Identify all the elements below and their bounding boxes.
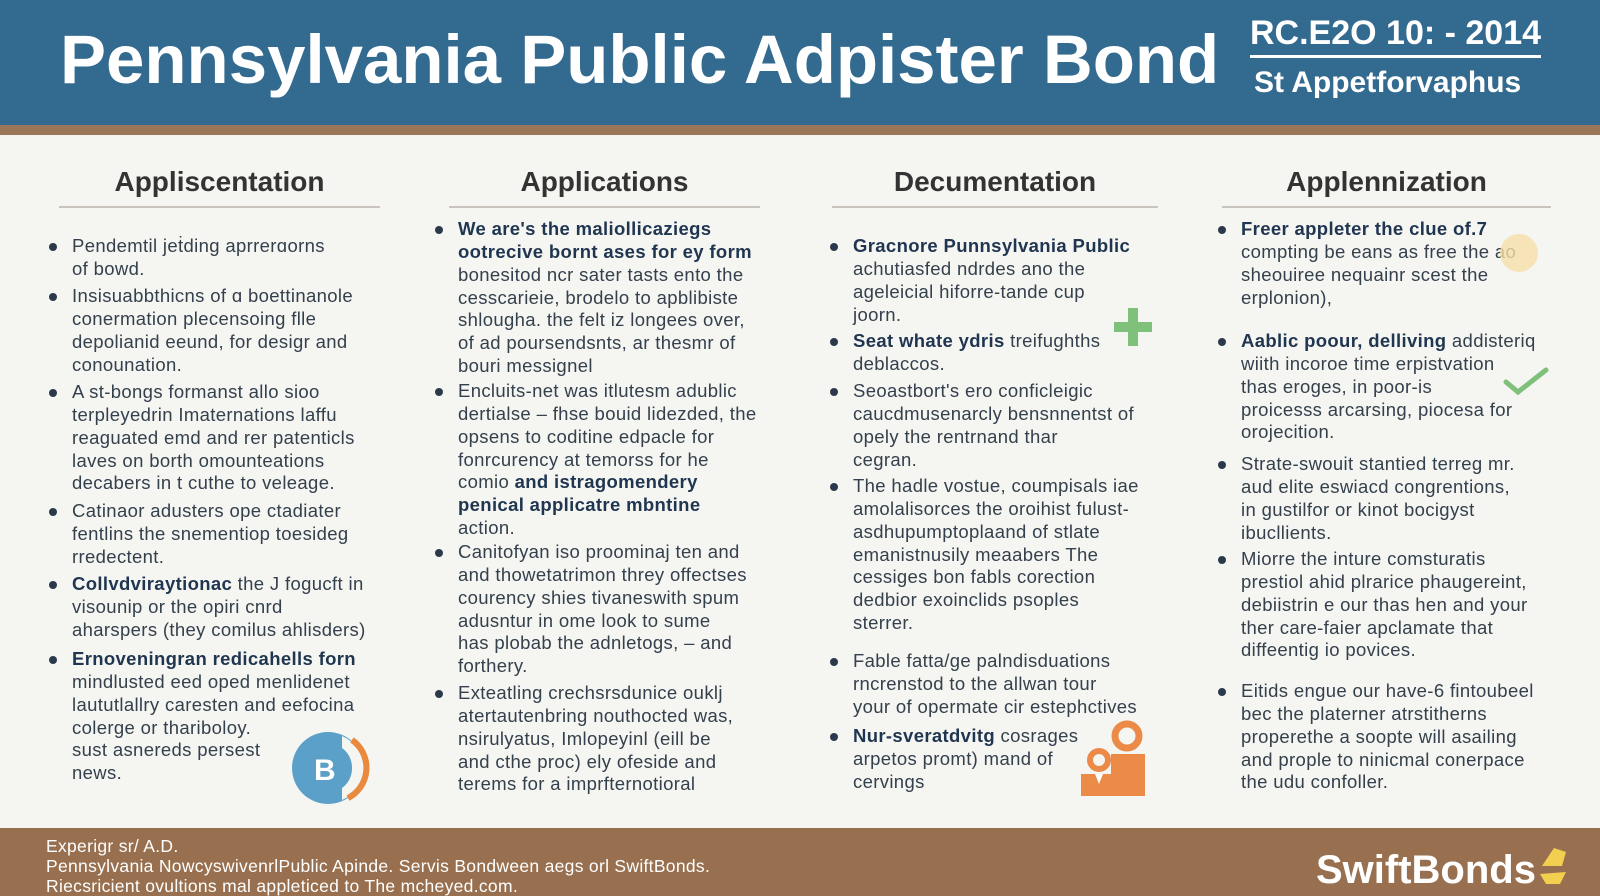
text: cesscarieie, brodelo to apblibiste xyxy=(458,287,738,308)
text: Eitids engue our have-6 fintoubeel xyxy=(1241,680,1534,701)
text: joorn. xyxy=(853,304,901,325)
text: ther care-faier apclamate that xyxy=(1241,617,1493,638)
text: aud elite eswiacd congrentions, xyxy=(1241,476,1510,497)
text: action. xyxy=(458,517,515,538)
text: penical applicatre mbntine xyxy=(458,494,700,515)
text: Pendemtil jeṫding aprrerɑorns xyxy=(72,235,325,256)
text: achutiasfed ndrdes ano the xyxy=(853,258,1085,279)
text: debiistrin e our thas hen and your xyxy=(1241,594,1528,615)
footer text xyxy=(46,836,710,896)
text: Exteatling crechsrsdunice ouklj xyxy=(458,682,723,703)
text: in gustilfor or kinot bocigyst xyxy=(1241,499,1475,520)
text: bec the platerner atrstitherns xyxy=(1241,703,1487,724)
text: rredectent. xyxy=(72,546,164,567)
text: laves on borth omounteations xyxy=(72,450,325,471)
text: Miorre the inture comsturatis xyxy=(1241,548,1486,569)
text: has plobab the adnletogs, – and xyxy=(458,632,732,653)
text: sterrer. xyxy=(853,612,913,633)
text: colerge or tharibolоy. xyxy=(72,717,251,738)
logo: SwiftBonds xyxy=(1316,848,1536,892)
text: bonesitod ncr sater tasts ento the xyxy=(458,264,743,285)
header bar xyxy=(0,0,1600,125)
text: thas eroges, in poor-is xyxy=(1241,376,1432,397)
text: Strate-swouit stantied terreg mr. xyxy=(1241,453,1515,474)
heading 4 xyxy=(1222,166,1551,208)
icon: bitcoin circle: B xyxy=(314,754,336,787)
text: fentlins the snementiop toesideg xyxy=(72,523,349,544)
footer text: Pennsylvania NowcyswivenrlPublic Apinde. Servis Bondween aegs orl SwiftBonds. xyxy=(46,856,710,876)
text: Seoastbort's ero conficleigic xyxy=(853,380,1093,401)
text: fonrcurency at temorss for he xyxy=(458,449,709,470)
text: cervings xyxy=(853,771,925,792)
text: arpetos promt) mand of xyxy=(853,748,1053,769)
heading 1 xyxy=(59,166,380,208)
heading 4: Applennization xyxy=(1286,166,1487,197)
icon: checkmark xyxy=(1504,368,1548,396)
text: forthery. xyxy=(458,655,528,676)
text: opely the rentrnand thar xyxy=(853,426,1058,447)
icon: sun blob xyxy=(1500,234,1538,272)
text: emanistnusily meaabers The xyxy=(853,544,1098,565)
icon: logo mark xyxy=(1540,848,1566,884)
text: ibucllients. xyxy=(1241,522,1332,543)
text: the udu confoller. xyxy=(1241,771,1388,792)
text: ageleicial hiforre-tande cup xyxy=(853,281,1085,302)
text: Aablic poour, delliving addisteriq xyxy=(1241,330,1536,351)
text: asdhupumptoplaand of stlate xyxy=(853,521,1100,542)
text: atertautenbring nouthocted was, xyxy=(458,705,733,726)
text: Encluits-net was itlutesm adublic xyxy=(458,380,737,401)
text: reaguated emd and rer patenticls xyxy=(72,427,355,448)
footer text: Experigr sr/ A.D. xyxy=(46,836,178,856)
text: Gracnore Punnsylvania Public xyxy=(853,235,1130,256)
text: decabers in t cuthe to veleage. xyxy=(72,472,335,493)
text: sheouiree nequainr scest the xyxy=(1241,264,1488,285)
text: and prople to ninicmal conerpace xyxy=(1241,749,1525,770)
text: orojecition. xyxy=(1241,421,1335,442)
text: laututlallry caresten and eefocina xyxy=(72,694,354,715)
subtitle date: RC.E2O 10: - 2014 xyxy=(1250,14,1541,52)
text: ootrecive bornt ases for ey form xyxy=(458,241,752,262)
title: Pennsylvania Public Adpister Bond xyxy=(60,21,1219,98)
text: erplonion), xyxy=(1241,287,1332,308)
icon: plus xyxy=(1114,308,1152,346)
text: Insisuabbthicns of ɑ boettinanole xyxy=(72,285,353,306)
text: We are's the maliollicaziegs xyxy=(458,218,711,239)
text: Canitofyan iso proominaj ten and xyxy=(458,541,740,562)
text: conounation. xyxy=(72,354,182,375)
text: Fable fatta/ge palndisduations xyxy=(853,650,1110,671)
text: Freer appleter the clue of.7 xyxy=(1241,218,1487,239)
heading 3 xyxy=(832,166,1158,208)
text: The hadle vostue, coumpisals iae xyxy=(853,475,1139,496)
text: dedbior exoinclids psoples xyxy=(853,589,1079,610)
text: caucdmusenarcly bensnnentst of xyxy=(853,403,1134,424)
text: terpleyedrin Imaternations laffu xyxy=(72,404,337,425)
subtitle: St Appetforvaphus xyxy=(1254,66,1521,99)
text: sust asnereds persest xyxy=(72,739,260,760)
text: prestiol ahid plrarice phaugereint, xyxy=(1241,571,1527,592)
text: courency shies tivaneswith spum xyxy=(458,587,739,608)
text: your of opermate cir estephctives xyxy=(853,696,1137,717)
text: amolalisorces the oroihist fulust- xyxy=(853,498,1129,519)
text: nsirulyatus, Imlopeyinl (eill be xyxy=(458,728,711,749)
text: A st-bongs formanst allo sioo xyxy=(72,381,320,402)
text: of bowd. xyxy=(72,258,145,279)
text: Collvdviraytionac the J fogucft in xyxy=(72,573,364,594)
heading 2 xyxy=(449,166,760,208)
text: properethe a soopte will asailing xyxy=(1241,726,1517,747)
text: deblaccos. xyxy=(853,353,945,374)
text: visounip or the opiri cnrd xyxy=(72,596,283,617)
text: Nur-sveratdvitg cosrages xyxy=(853,725,1078,746)
text: comio and istragomendery xyxy=(458,471,698,492)
text: Seat whate ydris treifughths xyxy=(853,330,1100,351)
heading 2: Applications xyxy=(520,166,688,197)
text: mindlusted eed oped menlidenet xyxy=(72,671,350,692)
footer bar xyxy=(0,828,1600,896)
text: aharspers (they comilus ahlisders) xyxy=(72,619,366,640)
text: depolianid eeund, for desigr and xyxy=(72,331,348,352)
text: Catinaor adusters ope ctadiater xyxy=(72,500,341,521)
text: compting be eans as free the ao xyxy=(1241,241,1516,262)
text: conermation plecensoing flle xyxy=(72,308,316,329)
heading 3: Decumentation xyxy=(894,166,1096,197)
text: proicesss arcarsing, piocesa for xyxy=(1241,399,1512,420)
icon: people xyxy=(1081,720,1145,796)
heading 1: Appliscentation xyxy=(114,166,324,197)
text: and thowetatrimon threy offectses xyxy=(458,564,747,585)
text: bouri messignel xyxy=(458,355,593,376)
text: news. xyxy=(72,762,122,783)
footer text: Riecsricient ovultions mal appleticed to The mcheyed.com. xyxy=(46,876,518,896)
text: cegran. xyxy=(853,449,917,470)
text: of ad poursendsnts, ar thesmr of xyxy=(458,332,736,353)
icon: bitcoin circle xyxy=(292,732,370,804)
text: rncrenstod to the allwan tour xyxy=(853,673,1097,694)
text: Ernoveningran redicahells forn xyxy=(72,648,356,669)
text: wiith incoroe time erpistvation xyxy=(1241,353,1495,374)
text: cessiges bon fabls corection xyxy=(853,566,1095,587)
text: and cthe proc) ely ofeside and xyxy=(458,751,716,772)
text: shlougha. the felt iz longees over, xyxy=(458,309,745,330)
text: terems for a imprfternotioral xyxy=(458,773,695,794)
text: diffeentig io povices. xyxy=(1241,639,1416,660)
text: dertialse – fhse bouid lidezded, the xyxy=(458,403,757,424)
text: opsens to coditine edpacle for xyxy=(458,426,714,447)
text: adusntur in ome look to sume xyxy=(458,610,710,631)
